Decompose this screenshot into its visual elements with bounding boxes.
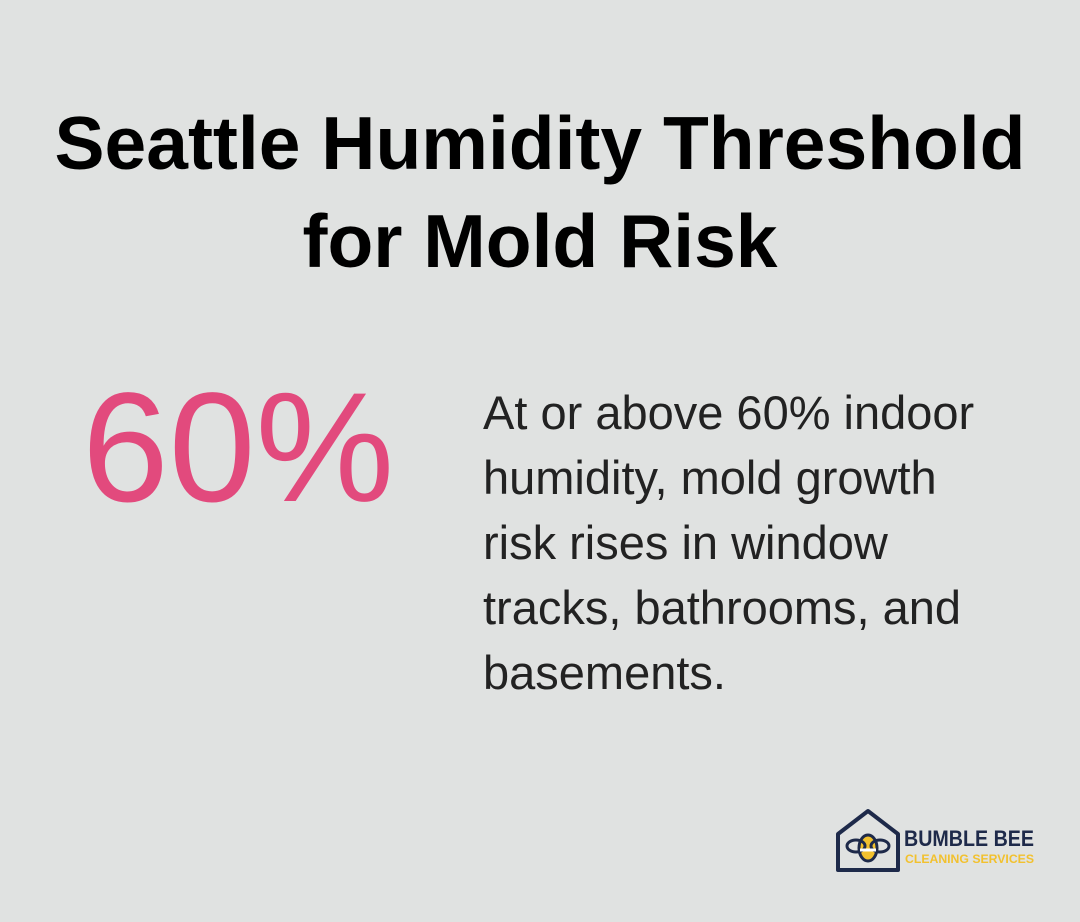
title (54, 101, 1025, 283)
description text: At or above 60% indoor (483, 386, 974, 439)
description text: humidity, mold growth (483, 451, 937, 504)
logo (836, 809, 1034, 872)
description text: basements. (483, 646, 726, 699)
description text: risk rises in window (483, 516, 888, 569)
description text: tracks, bathrooms, and (483, 581, 961, 634)
logo: CLEANING SERVICES (905, 852, 1034, 866)
big stat: 60% (82, 361, 394, 535)
description text (483, 386, 974, 699)
icon: house with bee (838, 811, 898, 870)
title: for Mold Risk (302, 199, 778, 283)
title: Seattle Humidity Threshold (54, 101, 1025, 185)
